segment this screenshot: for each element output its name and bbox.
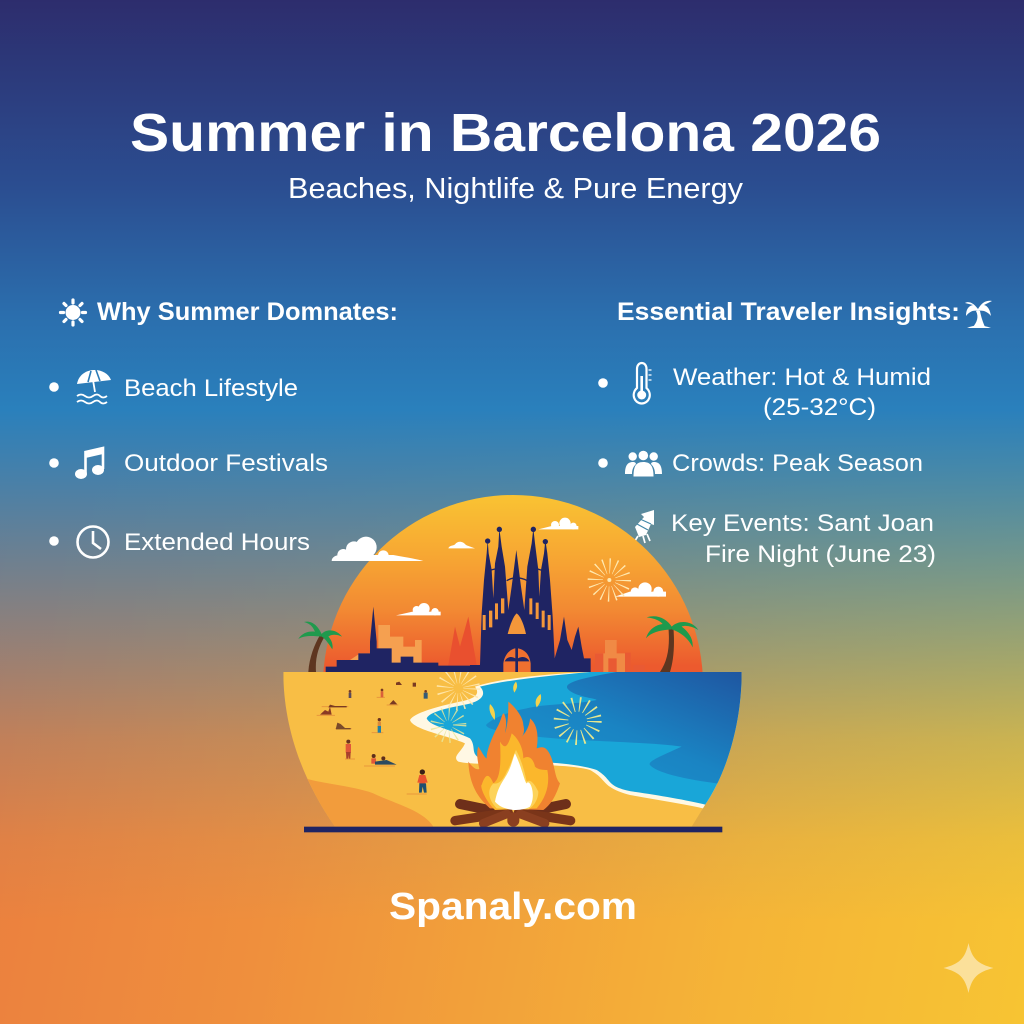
list item: key events: Key Events: Sant Joan — [671, 510, 934, 537]
beach and sea — [280, 672, 750, 832]
bonfire — [455, 702, 571, 823]
sun disc with skyline — [324, 495, 702, 672]
title: Summer in Barcelona 2026 — [130, 103, 881, 163]
flame: inner — [495, 753, 533, 810]
icon: palm — [965, 301, 992, 328]
firework: sky — [595, 566, 623, 594]
foam — [410, 672, 747, 810]
fireworks: shore — [437, 675, 594, 738]
icon: sun — [60, 300, 86, 325]
icon: sparkle — [944, 943, 994, 993]
flame: outer — [468, 702, 560, 810]
list item: key events: Fire Night (June 23) — [705, 541, 936, 568]
sea highlights — [489, 682, 541, 720]
skyline: navy silhouette — [326, 607, 480, 672]
logs — [455, 804, 571, 823]
sand — [283, 672, 703, 826]
list item: weather: (25-32°C) — [763, 394, 876, 421]
list item: key events — [633, 510, 936, 568]
beachgoers — [317, 682, 428, 794]
list item: extended hours: Extended Hours — [124, 529, 310, 556]
list item: outdoor festivals — [49, 448, 328, 479]
subtitle: Beaches, Nightlife & Pure Energy — [288, 173, 744, 205]
list item: extended hours — [49, 526, 310, 558]
heading: essential insights: Essential Traveler Insights: — [617, 298, 960, 326]
deep water — [486, 672, 747, 783]
list item: weather: Weather: Hot & Humid — [673, 364, 931, 391]
brand: Spanaly.com — [389, 886, 637, 928]
darker sand — [308, 779, 433, 826]
palm: right — [646, 616, 698, 672]
panel: why summer dominates — [49, 298, 398, 558]
Sagrada Familia — [470, 527, 591, 672]
list item: beach lifestyle — [49, 370, 298, 404]
list item: weather — [598, 363, 931, 421]
list item: beach lifestyle: Beach Lifestyle — [124, 375, 298, 402]
clouds — [332, 518, 666, 615]
list item: outdoor festivals: Outdoor Festivals — [124, 450, 328, 477]
flame: pale — [489, 750, 538, 809]
panel: traveler insights — [598, 298, 992, 568]
base line — [304, 827, 722, 832]
heading: why summer: Why Summer Domnates: — [97, 298, 398, 326]
illustration: Barcelona beach scene — [283, 495, 742, 832]
sea — [427, 672, 747, 805]
list item: crowds: Crowds: Peak Season — [672, 450, 923, 477]
palm: left — [298, 622, 342, 672]
flame: yellow — [481, 733, 548, 810]
distant skyline — [347, 617, 645, 672]
